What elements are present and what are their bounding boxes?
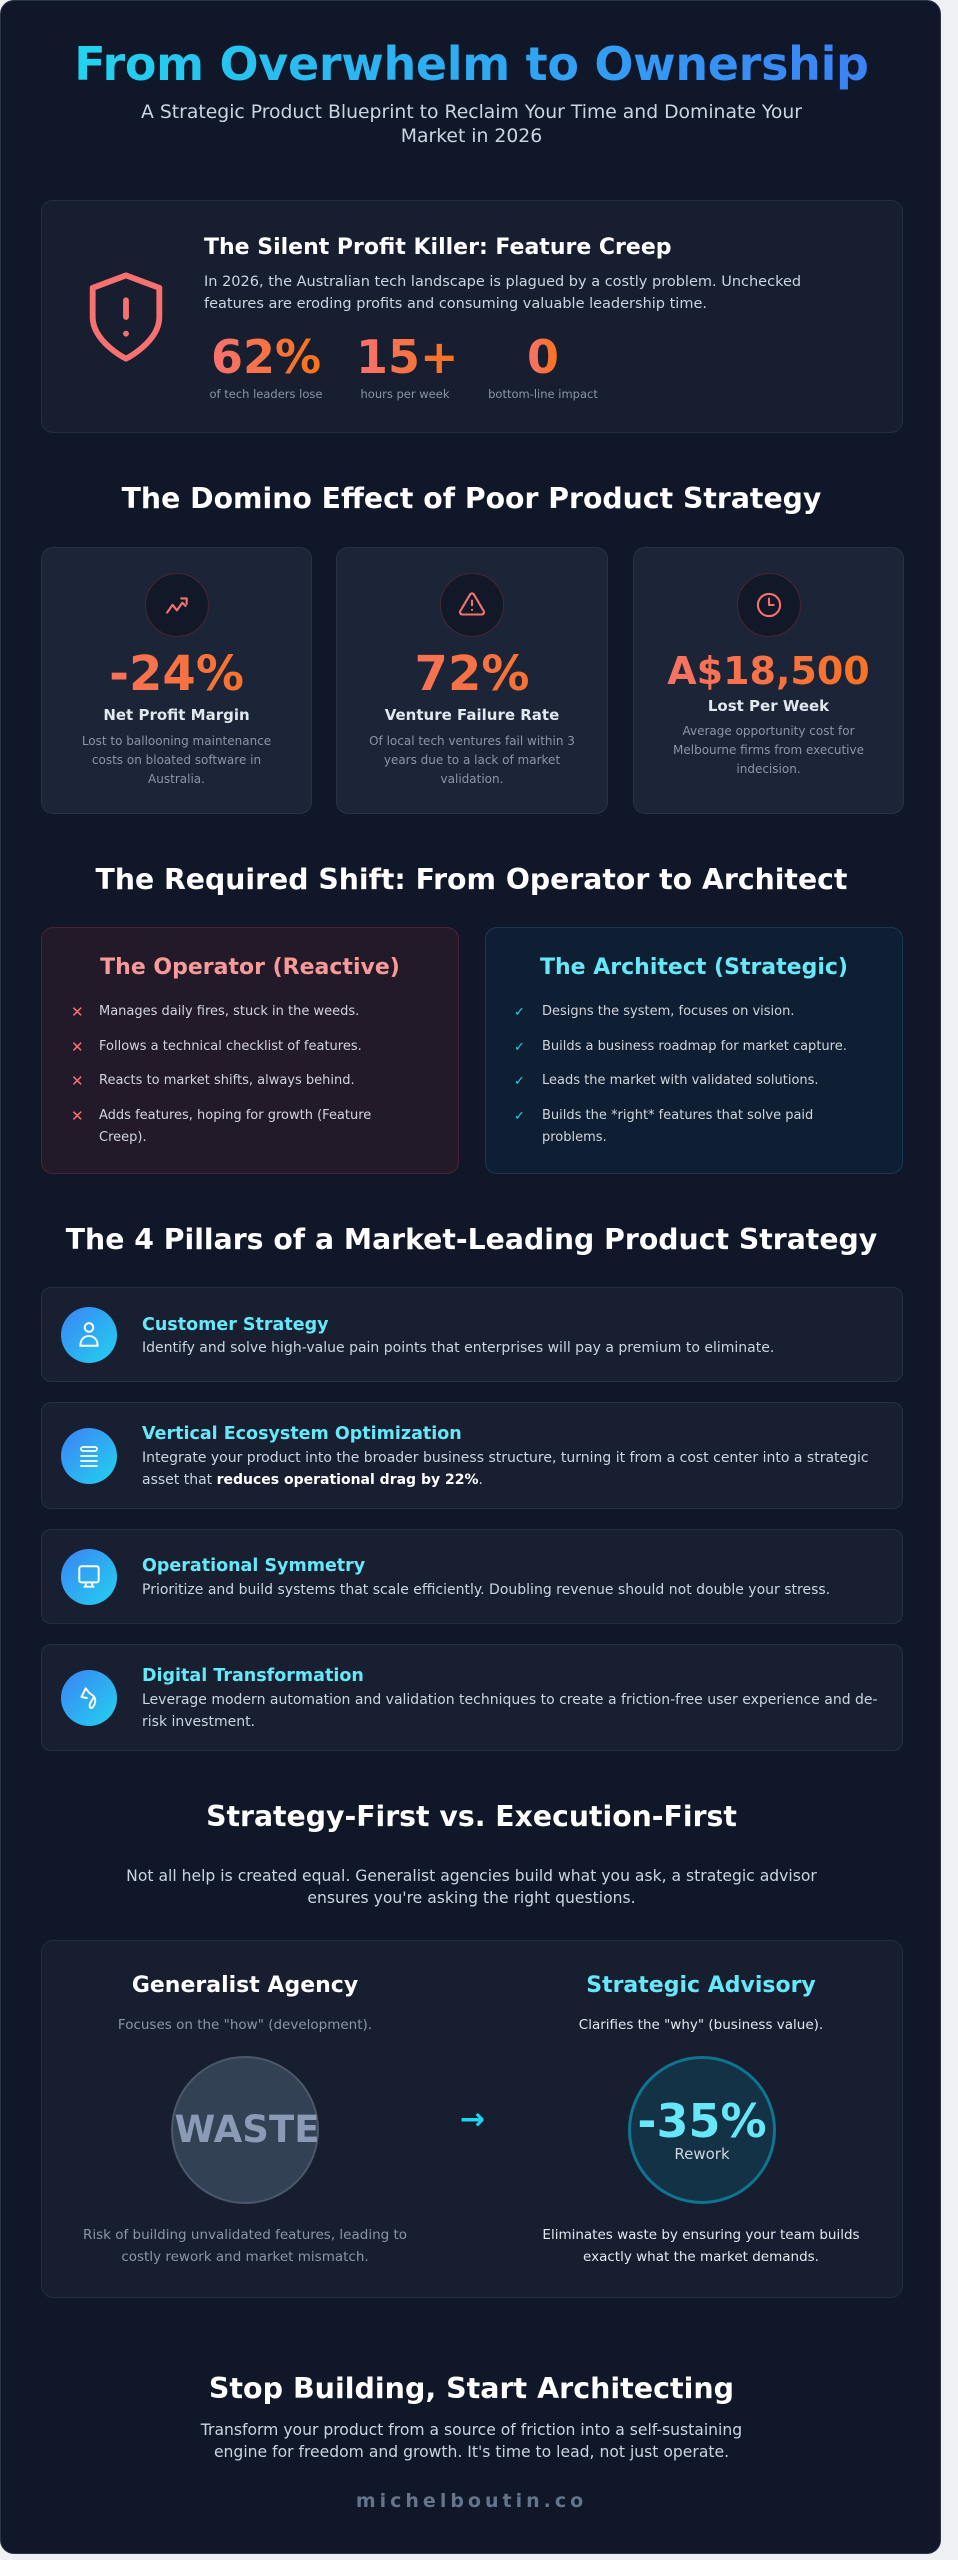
column: strategic advisory: Eliminates waste by ensuring your team builds [542, 2227, 860, 2243]
icon: trend [145, 573, 209, 637]
card: lost per week: Lost Per Week [708, 697, 829, 715]
intro paragraph: ensures you're asking the right questions. [307, 1889, 636, 1907]
list: problems. [542, 1130, 607, 1145]
icon: warning [440, 573, 504, 637]
pillar: customer strategy: Identify and solve high-value pain points that enterprises will pay a premium to eliminate. [142, 1340, 774, 1356]
closing paragraph: Transform your product from a source of friction into a self-sustaining [201, 2421, 742, 2439]
subtitle [141, 102, 802, 147]
stat: 62%: 62% [211, 330, 321, 384]
heading: 4 pillars: The 4 Pillars of a Market-Leading Product Strategy [66, 1223, 877, 1256]
column: generalist: Focuses on the "how" (development). [118, 2017, 372, 2033]
column: generalist: Risk of building unvalidated features, leading to [83, 2227, 407, 2243]
pillar: operational symmetry [41, 1529, 903, 1624]
column: generalist [83, 1973, 407, 2265]
subtitle: A Strategic Product Blueprint to Reclaim Your Time and Dominate Your [141, 102, 802, 123]
closing paragraph [200, 2421, 742, 2461]
stat: 15+: hours per week [361, 387, 449, 401]
stats row [210, 330, 598, 401]
closing paragraph: engine for freedom and growth. It's time to lead, not just operate. [214, 2443, 729, 2461]
footer brand: michelboutin.co [356, 2490, 587, 2512]
stat: 15+: 15+ [356, 330, 459, 384]
list: ✕ [71, 1038, 84, 1056]
intro paragraph [126, 1867, 817, 1907]
card: lost per week: Melbourne firms from executive [673, 743, 864, 757]
card: net profit margin [41, 547, 312, 814]
list: ✓ [514, 1005, 525, 1020]
card: lost per week: Average opportunity cost for [682, 724, 855, 738]
stat: 72% [415, 646, 529, 702]
stat: -24% [109, 646, 244, 702]
column: strategic advisory: Strategic Advisory [586, 1973, 816, 1998]
icon: shield alert [90, 272, 162, 362]
list: Follows a technical checklist of features. [99, 1039, 362, 1054]
icon: stack [61, 1428, 117, 1484]
body text: features are eroding profits and consuming valuable leadership time. [204, 296, 707, 312]
panel: architect [485, 927, 903, 1174]
subtitle: Market in 2026 [401, 126, 542, 147]
card: lost per week [633, 547, 904, 814]
icon: monitor [61, 1549, 117, 1605]
column: strategic advisory: Clarifies the "why" (business value). [579, 2017, 823, 2033]
card: venture failure: Of local tech ventures fail within 3 [369, 734, 575, 748]
body text [204, 274, 801, 312]
card: venture failure: years due to a lack of market [384, 753, 560, 767]
pillar: customer strategy: Customer Strategy [142, 1315, 329, 1335]
list: ✓ [514, 1040, 525, 1055]
pillar: customer strategy [41, 1287, 903, 1382]
pillar: vertical ecosystem [41, 1402, 903, 1509]
icon: clock [737, 573, 801, 637]
pillar: vertical ecosystem: Vertical Ecosystem Optimization [142, 1424, 462, 1444]
list: ✕ [71, 1003, 84, 1021]
stat: 0 [488, 330, 598, 401]
list: Adds features, hoping for growth (Feature [99, 1108, 371, 1123]
stat: A$18,500 [667, 649, 870, 693]
column: strategic advisory [542, 1973, 860, 2265]
heading: The Silent Profit Killer: Feature Creep [204, 235, 672, 260]
pillar: operational symmetry: Prioritize and build systems that scale efficiently. Doubling revenue should not double your stress. [142, 1582, 830, 1598]
stat: 0: 0 [527, 330, 559, 384]
panel title: The Architect (Strategic) [540, 955, 848, 980]
panel: feature creep [41, 200, 903, 433]
heading: strategy-first: Strategy-First vs. Execution-First [206, 1800, 737, 1833]
title: From Overwhelm to Ownership [74, 37, 869, 91]
pillar: digital transformation: Digital Transformation [142, 1666, 364, 1686]
list [514, 1004, 847, 1145]
card: net profit margin: Lost to ballooning maintenance [82, 734, 271, 748]
stat: 62%: of tech leaders lose [210, 387, 322, 401]
list: Builds the *right* features that solve paid [542, 1108, 813, 1123]
intro paragraph: Not all help is created equal. Generalist agencies build what you ask, a strategic advisor [126, 1867, 817, 1885]
panel: comparison [41, 1940, 903, 2298]
circle: -35%: Rework [674, 2145, 730, 2163]
list: Builds a business roadmap for market capture. [542, 1039, 847, 1054]
heading: required shift: The Required Shift: From Operator to Architect [96, 863, 847, 896]
pillar: digital transformation: Leverage modern automation and validation techniques to create a friction-free user experience and de- [142, 1692, 878, 1708]
card: venture failure: Venture Failure Rate [385, 706, 559, 724]
column: strategic advisory: exactly what the market demands. [583, 2249, 819, 2265]
pillar: digital transformation [41, 1644, 903, 1751]
circle: -35%: -35% [637, 2094, 767, 2148]
pillar: operational symmetry: Operational Symmetry [142, 1556, 365, 1576]
circle: -35% [628, 2056, 776, 2204]
list: ✕ [71, 1072, 84, 1090]
card: venture failure [336, 547, 608, 814]
heading: domino effect: The Domino Effect of Poor Product Strategy [122, 482, 821, 515]
pillar: vertical ecosystem: asset that reduces operational drag by 22%. [142, 1472, 483, 1488]
heading: call to action: Stop Building, Start Architecting [209, 2372, 734, 2405]
circle: waste: WASTE [175, 2108, 319, 2151]
card: venture failure: validation. [441, 772, 503, 786]
card: net profit margin: Australia. [148, 772, 205, 786]
list [71, 1003, 371, 1145]
pillar: vertical ecosystem: Integrate your product into the broader business structure, turning it from a cost center into a strategic [142, 1450, 869, 1466]
circle: waste [171, 2056, 319, 2204]
list: Leads the market with validated solutions. [542, 1073, 819, 1088]
list: ✓ [514, 1109, 525, 1124]
icon: squiggle [61, 1670, 117, 1726]
card: net profit margin: costs on bloated software in [92, 753, 261, 767]
panel: operator [41, 927, 459, 1174]
card: lost per week: indecision. [736, 762, 801, 776]
column: generalist: Generalist Agency [132, 1973, 358, 1998]
stat [42, 648, 311, 700]
body text: In 2026, the Australian tech landscape is plagued by a costly problem. Unchecked [204, 274, 801, 290]
list: Manages daily fires, stuck in the weeds. [99, 1004, 359, 1019]
icon: person [61, 1307, 117, 1363]
list: ✓ [514, 1074, 525, 1089]
list: ✕ [71, 1107, 84, 1125]
list: Creep). [99, 1130, 147, 1145]
panel title: The Operator (Reactive) [100, 955, 400, 980]
arrow: → [460, 2102, 485, 2137]
stat: 0: bottom-line impact [488, 387, 598, 401]
column: generalist: costly rework and market mismatch. [121, 2249, 369, 2265]
pillar: digital transformation: risk investment. [142, 1714, 255, 1730]
list: Reacts to market shifts, always behind. [99, 1073, 355, 1088]
list: Designs the system, focuses on vision. [542, 1004, 794, 1019]
card: net profit margin: Net Profit Margin [103, 706, 250, 724]
stat [337, 648, 607, 700]
